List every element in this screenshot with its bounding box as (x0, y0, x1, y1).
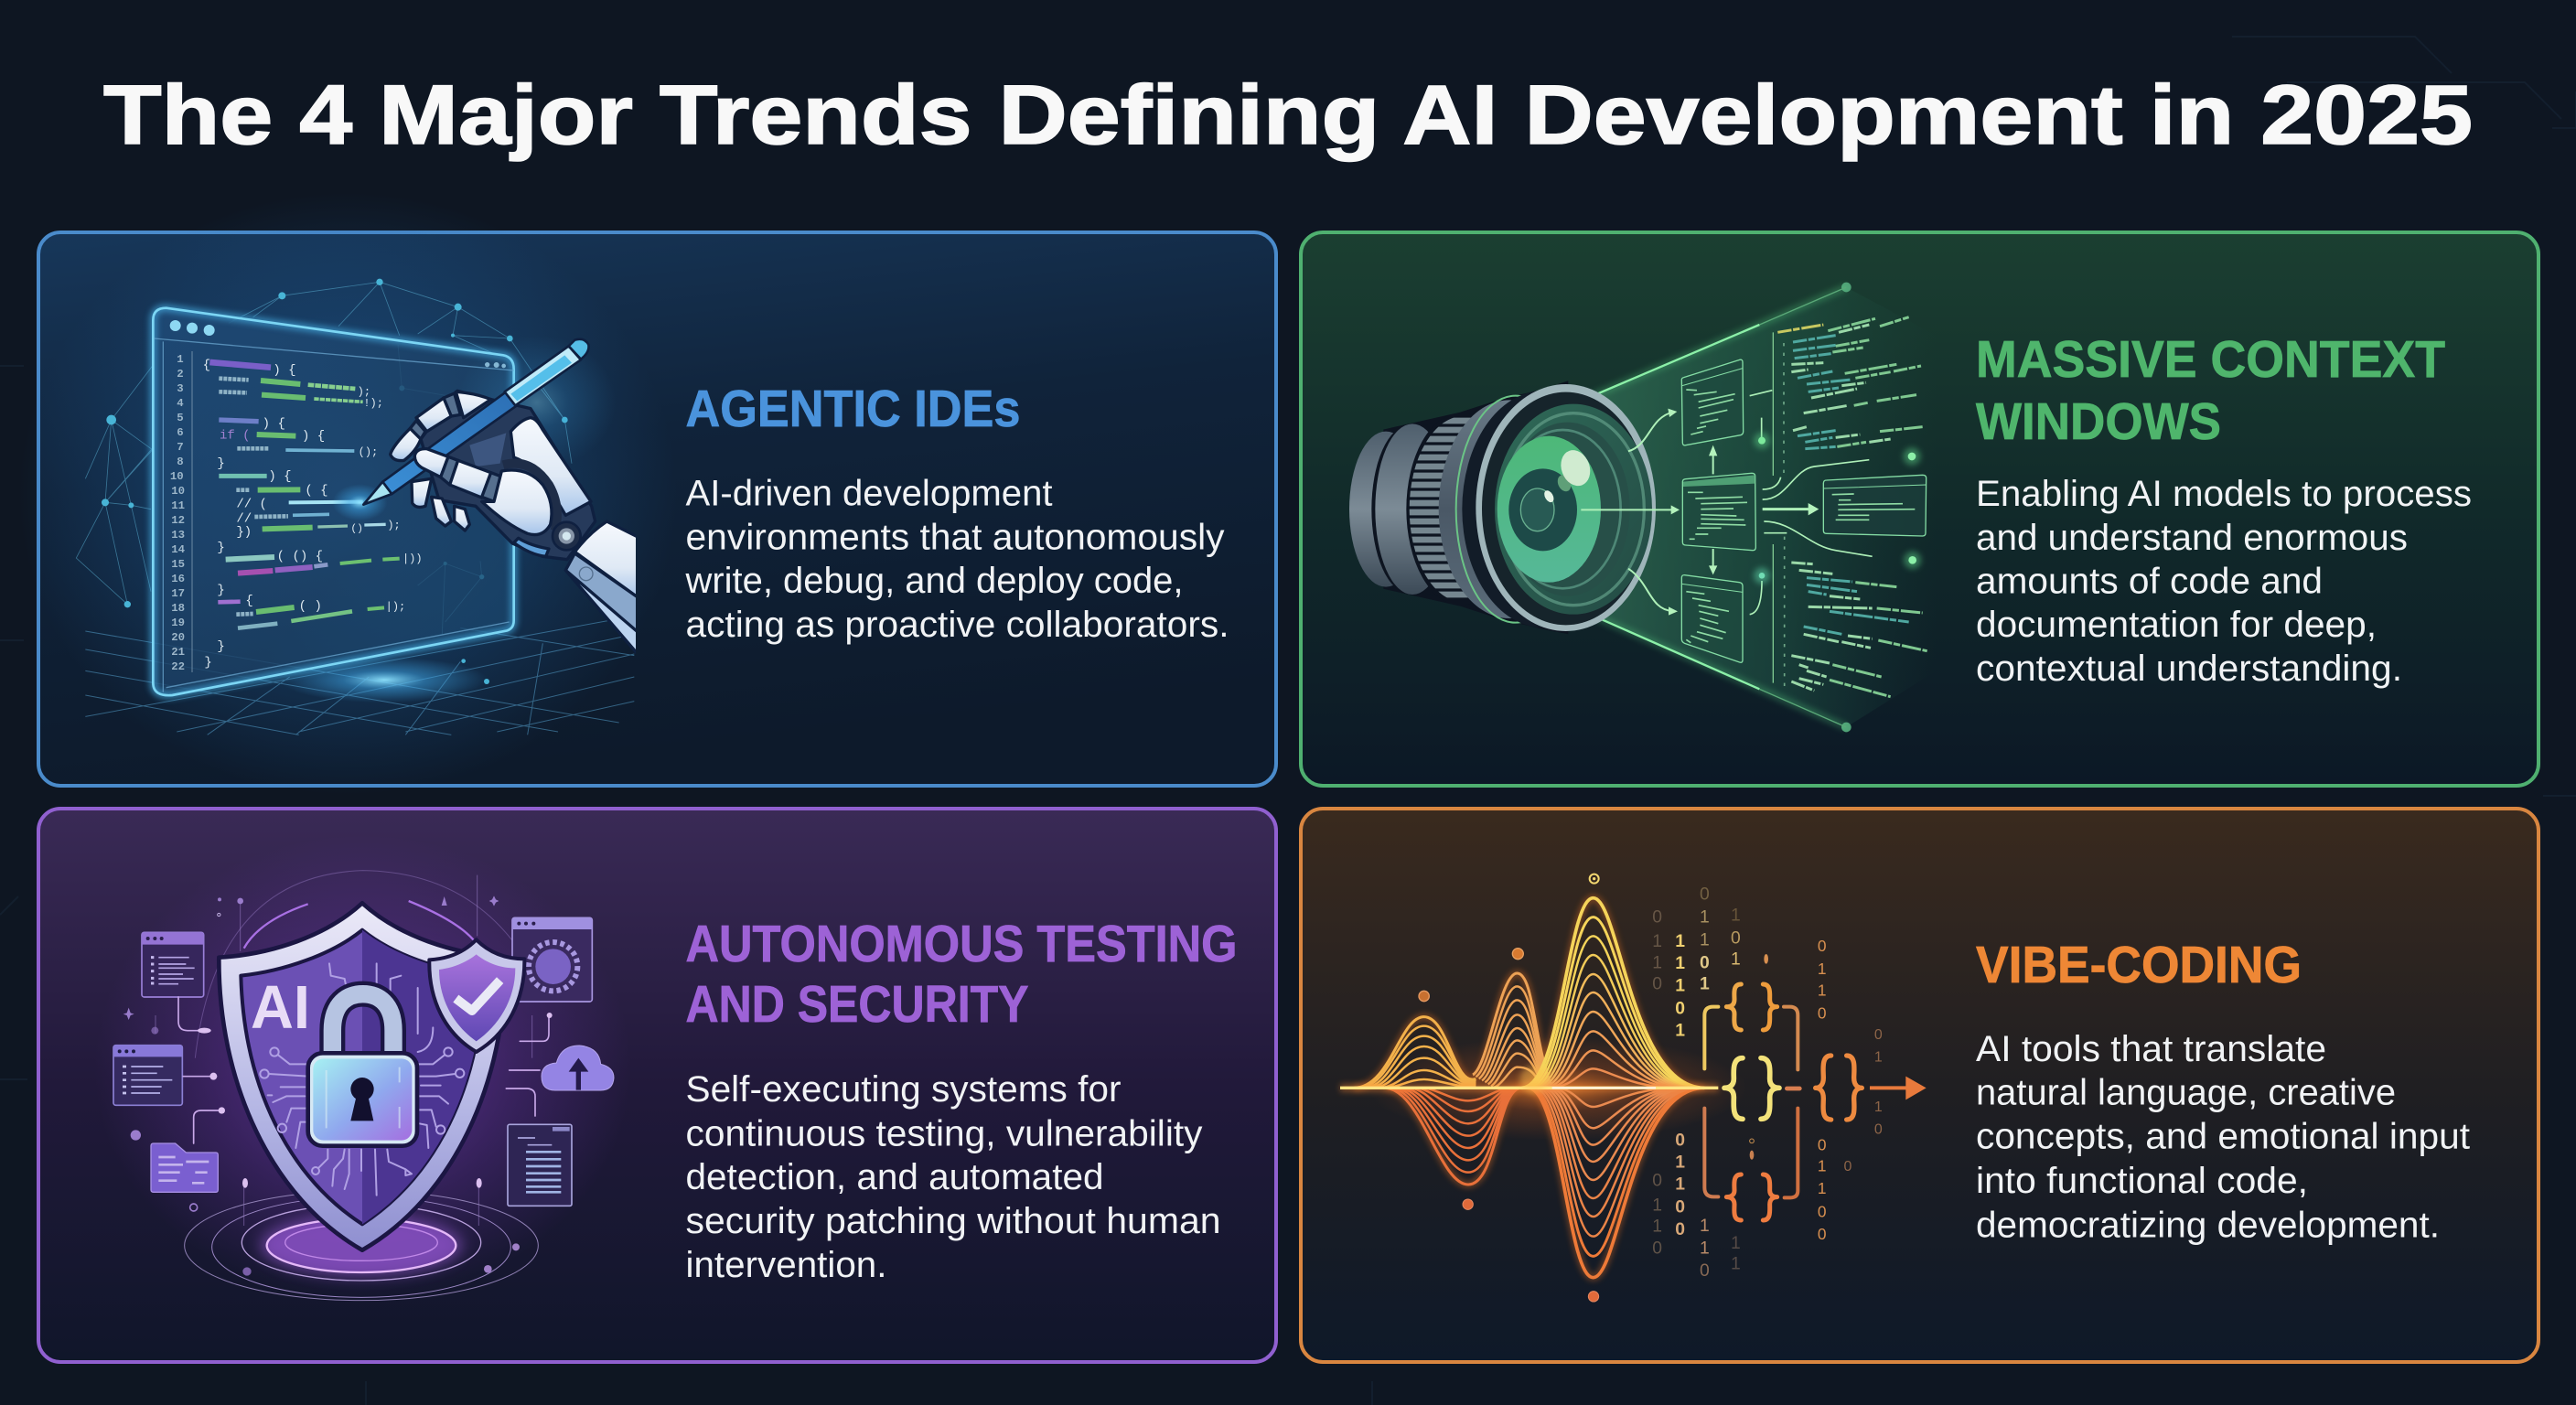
binary digits: 1 (1652, 1196, 1662, 1215)
line numbers: 13 (171, 529, 185, 542)
line numbers: 3 (177, 382, 184, 395)
illustration: holographic code window with robot hand: } (217, 541, 225, 555)
binary digits: 0 (1652, 1239, 1662, 1259)
illustration: holographic code window with robot hand: }) (236, 525, 252, 540)
icon: robot hand holding pen (363, 336, 640, 657)
binary digits: 0 (1652, 1172, 1662, 1191)
illustration: holographic code window with robot hand: } (217, 456, 225, 471)
description: agentic IDEs: acting as proactive collaborators. (686, 605, 1229, 645)
binary digits: 0 (1652, 975, 1662, 994)
illustration: security shield with lock (113, 864, 615, 1301)
projection beam (1552, 283, 1937, 732)
description: autonomous testing and security: Self-executing systems for (686, 1069, 1122, 1110)
binary digits: 1 (1652, 932, 1662, 951)
line numbers: 22 (171, 660, 185, 673)
binary digits: 0 (1652, 907, 1662, 927)
heading: autonomous testing and security: AND SECURITY (686, 975, 1028, 1034)
description: vibe-coding: AI tools that translate (1976, 1029, 2326, 1069)
heading: autonomous testing and security: AUTONOMOUS TESTING (686, 915, 1237, 973)
description: massive context windows: Enabling AI models to process (1976, 474, 2472, 514)
binary digits: 1 (1731, 1254, 1741, 1273)
binary digits: 1 (1675, 1022, 1685, 1041)
panel: massive context windows (1301, 232, 2538, 786)
description: massive context windows: documentation for deep, (1976, 605, 2377, 645)
panel: autonomous testing and security (38, 809, 1276, 1362)
line numbers: 6 (177, 426, 184, 439)
line numbers: 14 (171, 543, 186, 556)
circuit traces (260, 963, 464, 1196)
heading: vibe-coding: VIBE-CODING (1976, 936, 2302, 994)
line numbers: 17 (171, 587, 185, 600)
binary digits: 0 (1874, 1027, 1883, 1043)
heading: autonomous testing and security (686, 915, 1237, 1034)
line numbers: 1 (177, 353, 184, 366)
illustration: holographic code window with robot hand: ) { (273, 363, 296, 378)
description: autonomous testing and security: intervention. (686, 1245, 887, 1285)
description: autonomous testing and security: security patching without human (686, 1201, 1220, 1241)
binary digits: 0 (1818, 1003, 1826, 1022)
illustration: holographic code window with robot hand: ) { (263, 417, 285, 432)
description: vibe-coding (1976, 1029, 2470, 1246)
binary digits: 0 (1700, 885, 1710, 904)
description: massive context windows: contextual understanding. (1976, 649, 2402, 689)
binary digits: 1 (1675, 932, 1685, 951)
line numbers: 10 (171, 485, 185, 498)
panel: vibe-coding (1301, 809, 2538, 1362)
peak markers (1419, 874, 1599, 1302)
shield label: AI: AI (251, 974, 310, 1042)
illustration: holographic code window with robot hand: } (217, 639, 225, 654)
illustration: holographic code window with robot hand: } (204, 656, 212, 670)
binary digits: 1 (1700, 1217, 1710, 1236)
arrow: output (1870, 1077, 1927, 1099)
illustration: holographic code window with robot hand: ); (387, 519, 401, 531)
binary digits: 1 (1874, 1050, 1883, 1066)
heading: massive context windows (1976, 330, 2445, 451)
heading: massive context windows: WINDOWS (1976, 392, 2221, 451)
illustration: lens projecting code context (1349, 283, 1937, 732)
description: agentic IDEs: write, debug, and deploy code, (685, 561, 1184, 601)
panel: agentic IDEs (18, 192, 1276, 796)
wave glow (1354, 898, 1704, 1278)
illustration: holographic code window with robot hand: |); (386, 601, 405, 614)
illustration: holographic code window with robot hand: !); (363, 397, 383, 410)
illustration: holographic code window with robot hand: |)) (402, 552, 423, 565)
lower wave (1384, 1088, 1521, 1185)
line numbers: 5 (177, 412, 184, 424)
binary digits: 1 (1818, 1179, 1826, 1197)
main shield (219, 903, 506, 1250)
binary digits: 1 (1818, 981, 1826, 999)
heading: massive context windows: MASSIVE CONTEXT (1976, 330, 2445, 389)
code lines (209, 362, 400, 628)
illustration: holographic code window with robot hand: (); (359, 445, 378, 458)
line numbers: 18 (171, 602, 185, 615)
illustration: holographic code window with robot hand: ) { (268, 469, 292, 484)
glass window (153, 308, 514, 695)
title: The 4 Major Trends Defining AI Development in 2025 (103, 69, 2473, 162)
line numbers: 7 (177, 441, 184, 454)
binary digits: 1 (1700, 975, 1710, 994)
icon: upload cloud (542, 1046, 614, 1090)
code columns (1777, 317, 1927, 697)
flow diagram and code (1581, 317, 1927, 697)
binary digits: 0 (1675, 1197, 1685, 1217)
binary digits: 1 (1675, 1153, 1685, 1173)
binary digits: 0 (1818, 1225, 1826, 1243)
binary digits: 0 (1818, 1136, 1826, 1154)
connectors (178, 997, 549, 1143)
description: autonomous testing and security (686, 1069, 1220, 1285)
line numbers: 16 (171, 573, 185, 585)
binary digits: 0 (1874, 1121, 1883, 1137)
illustration: holographic code window with robot hand: // ( (236, 498, 267, 512)
description: autonomous testing and security: continuous testing, vulnerability (686, 1114, 1202, 1154)
binary digits: 1 (1700, 907, 1710, 927)
line numbers: 4 (177, 397, 184, 410)
illustration: holographic code window with robot hand: if ( (220, 428, 251, 443)
line numbers: 12 (171, 514, 185, 527)
description: agentic IDEs: environments that autonomously (686, 518, 1224, 558)
binary digits (1652, 885, 1883, 1281)
side windows (113, 917, 592, 1206)
illustration: holographic code window with robot hand: ( ) (299, 599, 322, 614)
binary digits: 1 (1731, 949, 1741, 969)
binary digits: 0 (1818, 937, 1826, 955)
glowing nodes (1754, 433, 1921, 584)
illustration: sound wave becoming code (1340, 874, 1927, 1302)
illustration: holographic code window with robot hand: ( { (305, 483, 328, 498)
illustration: holographic code window with robot hand: { (245, 594, 253, 608)
description: agentic IDEs (685, 474, 1229, 645)
binary digits: 1 (1675, 954, 1685, 973)
description: massive context windows: amounts of code and (1976, 562, 2323, 602)
illustration: holographic code window with robot hand (57, 220, 640, 765)
description: agentic IDEs: AI-driven development (686, 474, 1052, 514)
binary digits: 1 (1675, 976, 1685, 995)
binary digits: 0 (1675, 1132, 1685, 1151)
description: vibe-coding: democratizing development. (1976, 1206, 2440, 1246)
heading: agentic IDEs: AGENTIC IDEs (686, 380, 1021, 438)
pen (363, 339, 589, 505)
binary digits: 0 (1844, 1159, 1852, 1174)
binary digits: 1 (1731, 906, 1741, 926)
description: vibe-coding: into functional code, (1976, 1161, 2308, 1201)
line numbers: 2 (177, 368, 184, 381)
binary digits: 1 (1652, 1217, 1662, 1237)
icon: camera lens (1349, 384, 1656, 631)
binary digits: 0 (1700, 1261, 1710, 1281)
baseline (1340, 1077, 1718, 1099)
binary digits: 0 (1731, 929, 1741, 949)
binary digits: 1 (1874, 1099, 1883, 1115)
binary digits: 1 (1818, 1157, 1826, 1175)
description: massive context windows: and understand enormous (1976, 518, 2408, 558)
line numbers: 8 (177, 456, 184, 468)
binary digits: 0 (1675, 1220, 1685, 1239)
illustration: holographic code window with robot hand: // (236, 512, 252, 527)
line numbers: 19 (171, 617, 185, 629)
binary digits: 1 (1652, 953, 1662, 972)
network mesh (76, 282, 572, 634)
description: autonomous testing and security: detection, and automated (686, 1157, 1103, 1197)
line numbers: 10 (170, 470, 184, 483)
illustration: holographic code window with robot hand: ); (358, 386, 370, 399)
code brackets (1704, 984, 1862, 1220)
illustration: holographic code window with robot hand: () (350, 524, 363, 535)
binary digits: 1 (1700, 1239, 1710, 1259)
arrows (1581, 391, 1873, 615)
upper wave (1354, 1017, 1476, 1088)
binary digits: 1 (1675, 1175, 1685, 1195)
line numbers: 11 (171, 499, 185, 512)
icon: checkmark shield (429, 939, 524, 1052)
padlock (308, 994, 417, 1146)
description: massive context windows (1976, 474, 2472, 689)
binary digits: 0 (1818, 1203, 1826, 1221)
illustration: holographic code window with robot hand: ) { (302, 429, 325, 444)
holographic platform (185, 1191, 538, 1301)
line numbers: 15 (171, 558, 185, 571)
binary digits: 1 (1731, 1234, 1741, 1253)
description: vibe-coding: natural language, creative (1976, 1072, 2396, 1112)
binary digits: 0 (1675, 999, 1685, 1018)
illustration: holographic code window with robot hand: { (203, 359, 210, 373)
binary digits: 0 (1700, 953, 1710, 972)
floor grid (85, 616, 634, 735)
description: vibe-coding: concepts, and emotional input (1976, 1116, 2470, 1156)
line numbers: 20 (171, 631, 185, 644)
illustration: holographic code window with robot hand: ( () { (277, 550, 323, 564)
binary digits: 1 (1818, 960, 1826, 978)
binary digits: 1 (1700, 930, 1710, 949)
line numbers: 21 (171, 646, 185, 659)
illustration: holographic code window with robot hand: } (217, 583, 225, 597)
orbit arcs (156, 871, 537, 1226)
